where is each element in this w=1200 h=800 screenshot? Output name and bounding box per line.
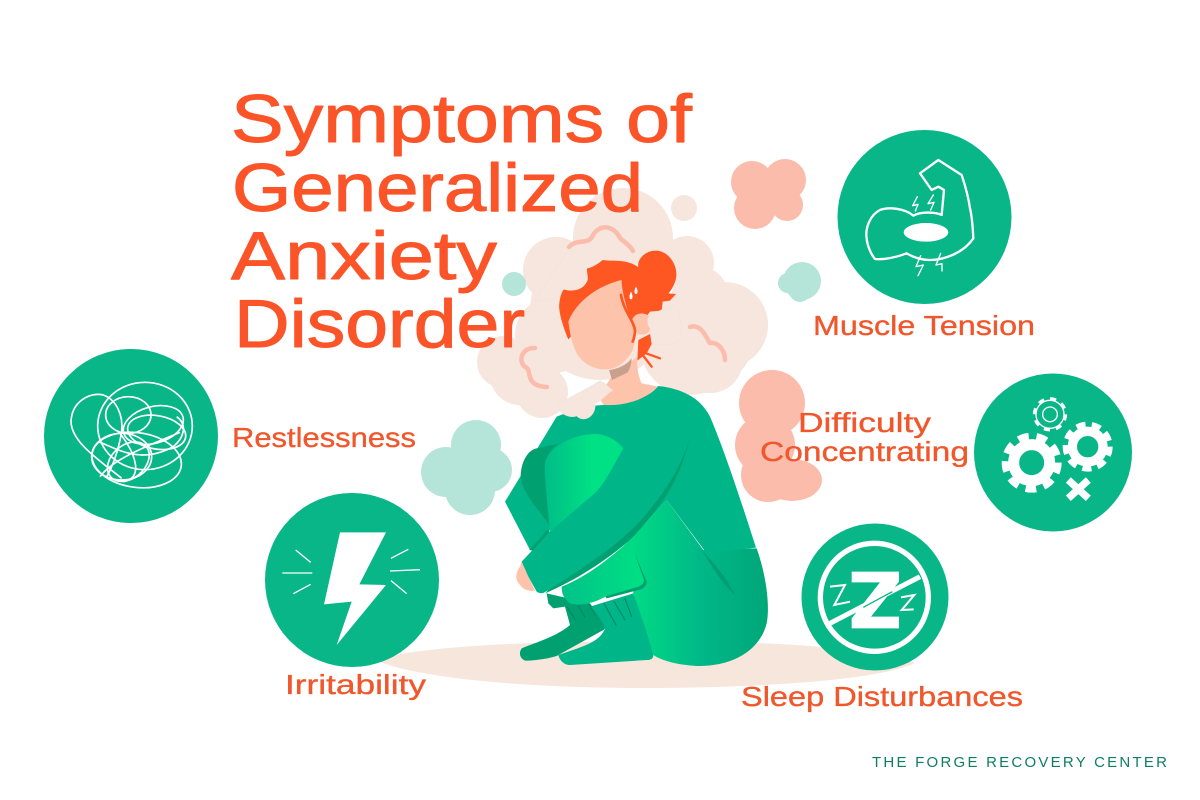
torso xyxy=(505,386,756,553)
icon: restlessness scribble xyxy=(44,349,218,523)
thought cloud xyxy=(477,188,768,418)
title: Disorder xyxy=(234,286,525,362)
decorative cloud: teal right xyxy=(778,262,821,302)
pocket xyxy=(702,549,735,595)
cloud: salmon squiggles xyxy=(521,227,725,387)
label: Difficulty Concentrating: Difficulty xyxy=(798,407,931,438)
label: Sleep Disturbances: Sleep Disturbances xyxy=(741,681,1023,712)
front leg and foot xyxy=(558,593,653,665)
arm shadow xyxy=(545,437,690,593)
sock ribs xyxy=(567,599,632,625)
cloud puff over shoulder xyxy=(557,381,613,419)
title: Symptoms of xyxy=(231,81,692,157)
decorative cloud: salmon lower xyxy=(735,370,822,502)
label: Difficulty Concentrating: Concentrating xyxy=(760,436,969,467)
hand xyxy=(516,562,535,591)
shin cuff xyxy=(603,539,647,598)
icon: gears xyxy=(974,374,1132,532)
title xyxy=(231,81,692,362)
icon: irritability lightning xyxy=(265,493,439,667)
label: Irritability: Irritability xyxy=(285,669,426,700)
figure: seated body in green pyjamas xyxy=(505,386,768,666)
decorative cloud: teal left small xyxy=(502,272,526,296)
label: Difficulty Concentrating xyxy=(760,407,969,467)
figure: head and hair xyxy=(535,250,682,410)
decorative cloud: salmon top xyxy=(731,159,806,229)
far arm inner shadow xyxy=(521,443,560,525)
back leg and foot xyxy=(520,593,607,661)
thigh and hip xyxy=(630,500,768,666)
title: Anxiety xyxy=(231,218,497,294)
brand footer: THE FORGE RECOVERY CENTER xyxy=(872,754,1167,771)
icon: muscle tension xyxy=(838,130,1012,304)
title: Generalized xyxy=(232,150,643,226)
decorative cloud: teal lower left xyxy=(421,420,512,515)
ground shadow xyxy=(375,642,915,688)
arm xyxy=(522,407,690,593)
label: Muscle Tension: Muscle Tension xyxy=(813,310,1035,341)
knee xyxy=(545,434,623,532)
icon: no sleep xyxy=(802,524,948,670)
label: Restlessness: Restlessness xyxy=(232,422,416,453)
